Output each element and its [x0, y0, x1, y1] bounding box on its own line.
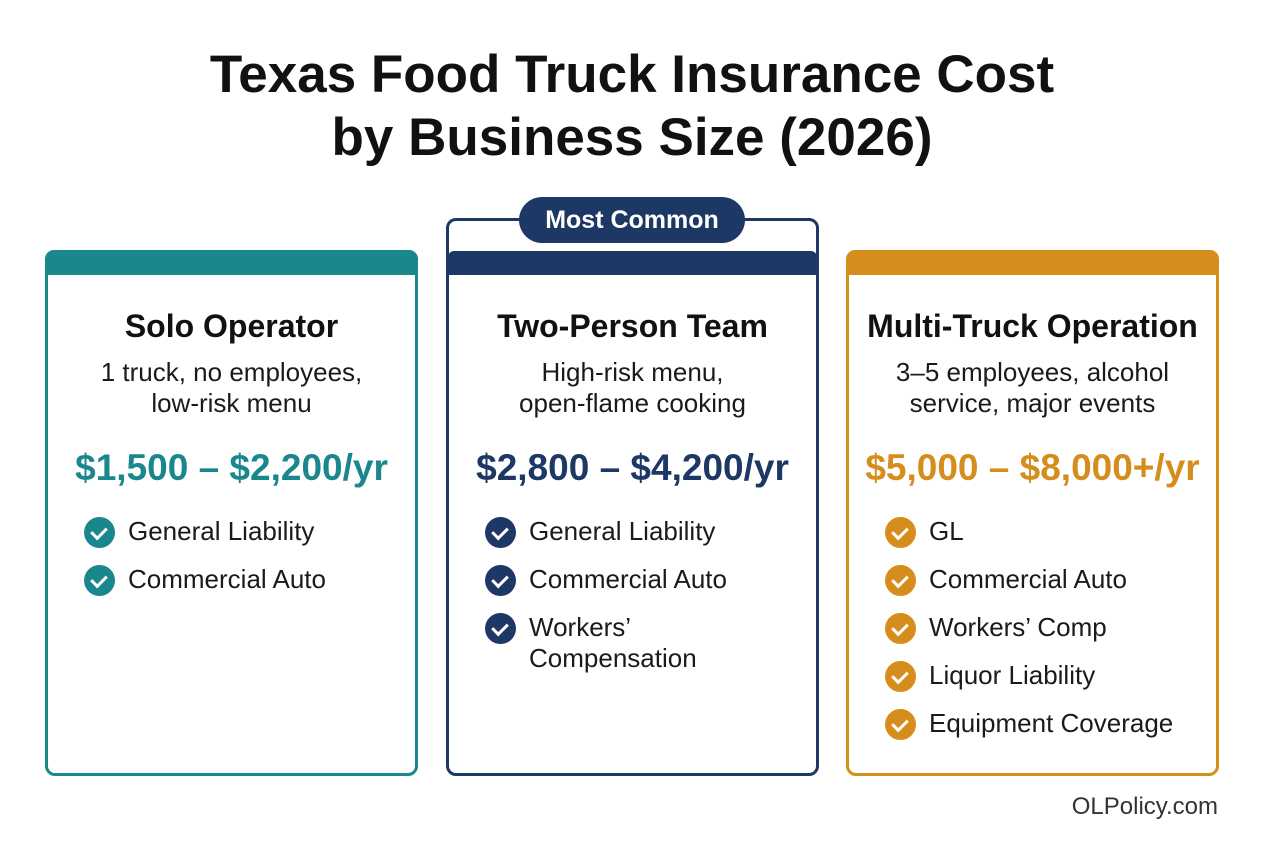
- title: Texas Food Truck Insurance Cost: [210, 45, 1054, 104]
- coverage list: two-person: Compensation: [529, 643, 697, 673]
- coverage list: solo: [84, 516, 326, 596]
- subtitle: multi-truck: service, major events: [910, 388, 1155, 418]
- title: [210, 45, 1054, 167]
- subtitle: multi-truck: [896, 357, 1169, 418]
- coverage list: multi-truck: Workers’ Comp: [929, 612, 1107, 642]
- subtitle: multi-truck: 3–5 employees, alcohol: [896, 357, 1169, 387]
- coverage list: two-person: Commercial Auto: [529, 564, 727, 594]
- coverage list: solo: Commercial Auto: [128, 564, 326, 594]
- coverage list: multi-truck: Commercial Auto: [929, 564, 1127, 594]
- subtitle: two-person: open-flame cooking: [519, 388, 746, 418]
- subtitle: solo: 1 truck, no employees,: [101, 357, 362, 387]
- coverage list: multi-truck: Equipment Coverage: [929, 708, 1173, 738]
- coverage list: two-person: General Liability: [529, 516, 715, 546]
- coverage list: two-person: Workers’: [529, 612, 631, 642]
- coverage list: multi-truck: GL: [929, 516, 964, 546]
- badge: most common: Most Common: [545, 206, 719, 234]
- subtitle: solo: low-risk menu: [151, 388, 312, 418]
- panel: multi-truck operation: [846, 250, 1219, 776]
- subtitle: two-person: High-risk menu,: [541, 357, 724, 387]
- coverage list: two-person: [485, 516, 727, 673]
- heading: multi-truck: Multi-Truck Operation: [867, 308, 1198, 344]
- coverage list: solo: General Liability: [128, 516, 314, 546]
- coverage list: multi-truck: [885, 516, 1173, 740]
- footer: source: OLPolicy.com: [1072, 793, 1218, 820]
- subtitle: two-person: [519, 357, 746, 418]
- price: two-person: $2,800 – $4,200/yr: [476, 447, 789, 488]
- panel: two-person team: [446, 218, 819, 776]
- title: by Business Size (2026): [332, 108, 932, 167]
- badge: most common: [519, 197, 745, 243]
- price: multi-truck: $5,000 – $8,000+/yr: [865, 447, 1200, 488]
- price: solo: $1,500 – $2,200/yr: [75, 447, 388, 488]
- heading: two-person: Two-Person Team: [497, 308, 768, 344]
- panel: solo operator: [45, 250, 418, 776]
- heading: solo: Solo Operator: [125, 308, 338, 344]
- subtitle: solo: [101, 357, 362, 418]
- coverage list: multi-truck: Liquor Liability: [929, 660, 1095, 690]
